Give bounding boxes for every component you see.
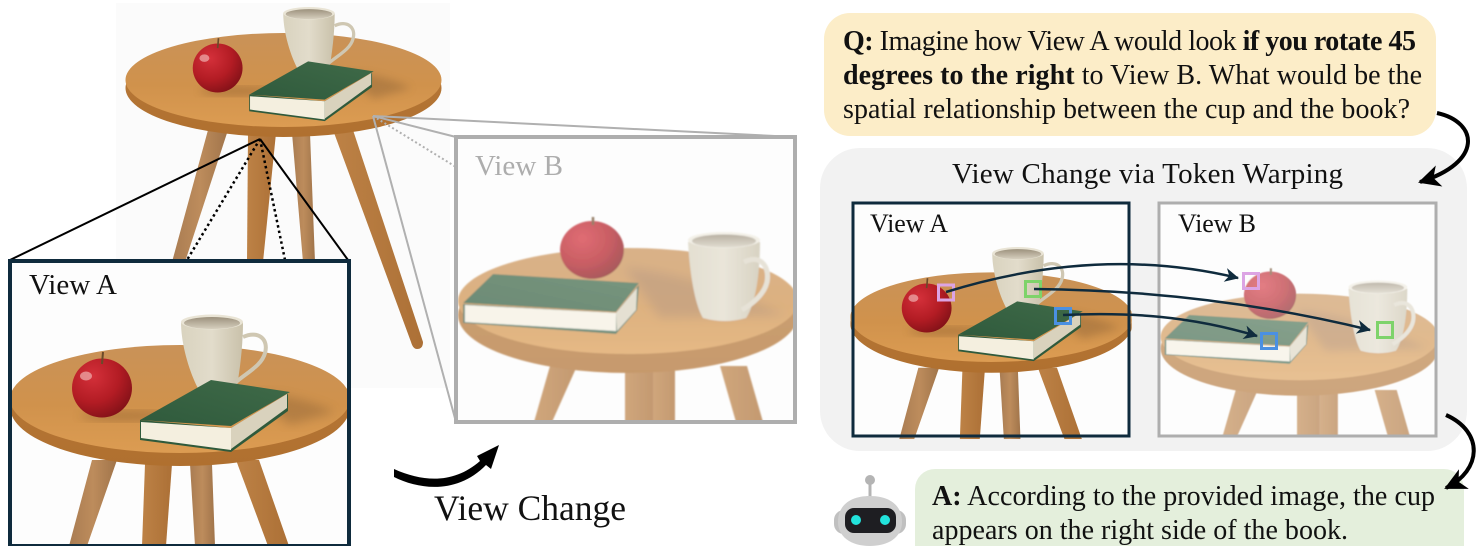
label: view change: View Change bbox=[434, 488, 626, 528]
token warp arrows bbox=[946, 264, 1370, 336]
panel: View A large: View A bbox=[29, 269, 117, 301]
icon: robot bbox=[834, 475, 906, 546]
zoom lines to View B bbox=[373, 116, 795, 422]
arrow: view change bbox=[394, 445, 499, 487]
answer bubble bbox=[915, 469, 1464, 546]
panel: View B large: View B bbox=[475, 150, 563, 182]
answer bubble: appears on the right side of the book. bbox=[932, 515, 1348, 546]
panel: View B small: View B bbox=[1178, 209, 1256, 238]
panel: View B large bbox=[456, 137, 798, 422]
question bubble: spatial relationship between the cup and the book? bbox=[843, 94, 1410, 125]
warping heading: View Change via Token Warping bbox=[952, 158, 1343, 190]
question bubble: degrees to the right to View B. What would be the bbox=[843, 60, 1422, 91]
question bubble bbox=[824, 13, 1436, 136]
arrow: warping to answer bbox=[1446, 415, 1474, 488]
question bubble: Q: Imagine how View A would look if you rotate 45 bbox=[843, 26, 1416, 57]
panel: View A small: View A bbox=[870, 209, 948, 238]
panel: View A large bbox=[10, 261, 350, 546]
arrow: question to warping bbox=[1420, 113, 1468, 182]
token squares bbox=[938, 274, 1392, 348]
photo: full table with objects bbox=[116, 3, 450, 388]
answer bubble: A: According to the provided image, the cup bbox=[932, 481, 1435, 512]
panel: View B small bbox=[1159, 203, 1438, 436]
panel: view change via token warping bbox=[820, 148, 1467, 451]
zoom lines to View A bbox=[10, 139, 348, 260]
panel: View A small bbox=[850, 203, 1132, 439]
